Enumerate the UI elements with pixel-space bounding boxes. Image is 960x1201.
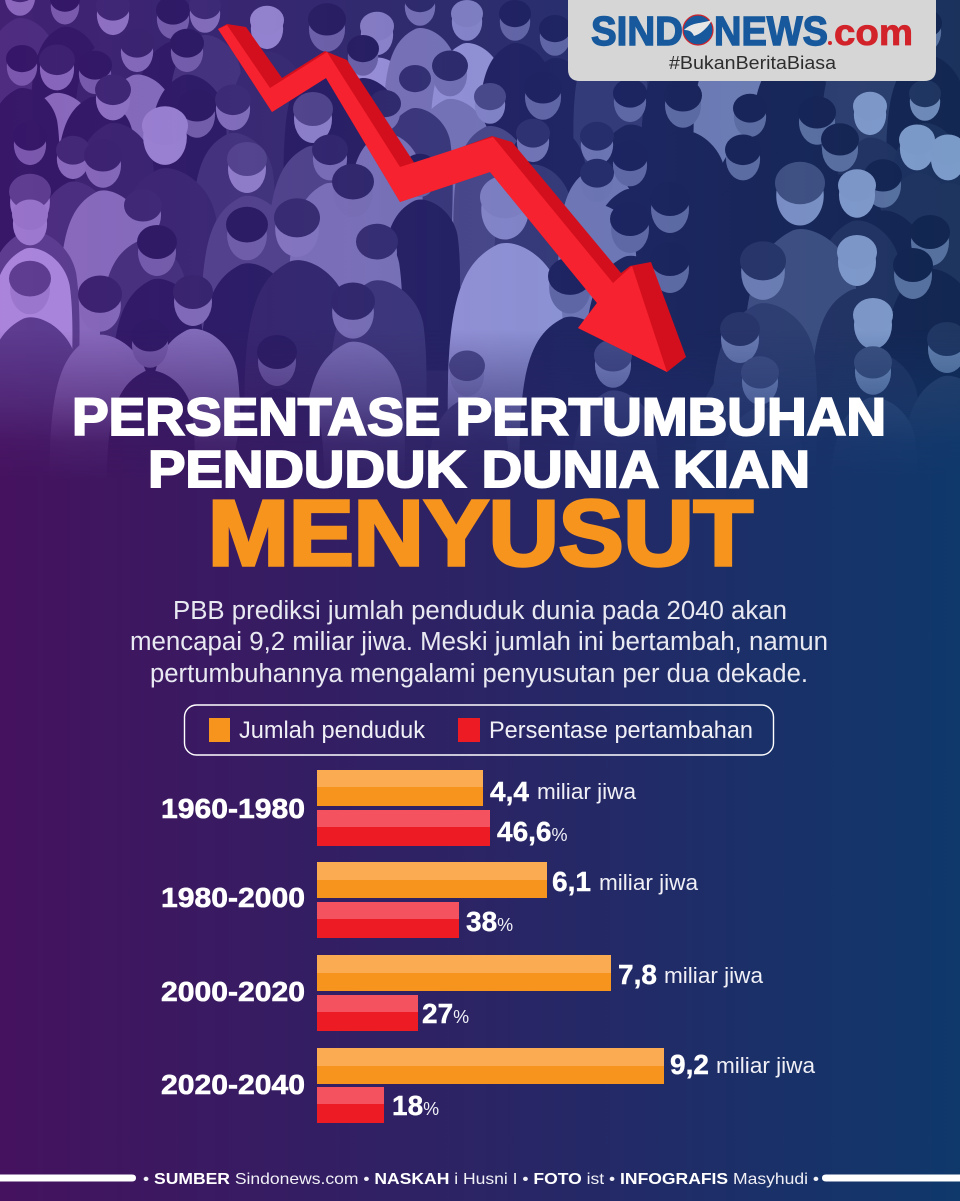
intro paragraph: PBB prediksi jumlah penduduk dunia pada 2040 akan xyxy=(173,597,787,625)
chart: bars 1960-1980: 4,4 xyxy=(490,776,529,807)
logo wordmark: NEWS xyxy=(714,8,828,54)
chart: bars 1980-2000: 38% xyxy=(466,906,513,937)
chart: bars 2000-2020: miliar jiwa xyxy=(664,963,764,988)
chart: bars 2020-2040: 18% xyxy=(392,1090,439,1121)
legend xyxy=(184,705,774,755)
intro paragraph: pertumbuhannya mengalami penyusutan per dua dekade. xyxy=(150,660,808,688)
chart: bars 1980-2000: 6,1 xyxy=(552,866,591,897)
crowd photo xyxy=(0,0,960,456)
logo wordmark: SIND xyxy=(591,8,683,54)
legend: Persentase pertambahan xyxy=(489,717,753,744)
logo wordmark: com xyxy=(834,12,913,53)
title: PERSENTASE PERTUMBUHAN xyxy=(72,388,886,447)
chart: bars 2000-2020: 7,8 xyxy=(618,959,657,990)
title: PENDUDUK DUNIA KIAN xyxy=(148,441,810,499)
footer credits: • SUMBER Sindonews.com • NASKAH i Husni I • FOTO ist • INFOGRAFIS Masyhudi • xyxy=(143,1171,819,1188)
chart: bars 2000-2020: 2000-2020 xyxy=(161,976,305,1007)
chart: bars 1960-1980: 46,6% xyxy=(497,816,568,847)
logo wordmark xyxy=(591,8,913,54)
chart: bars 1960-1980: miliar jiwa xyxy=(537,779,637,804)
intro paragraph: mencapai 9,2 miliar jiwa. Meski jumlah ini bertambah, namun xyxy=(130,628,828,656)
legend: Jumlah penduduk xyxy=(239,717,426,744)
intro paragraph xyxy=(130,597,828,688)
chart: bars 1960-1980: 1960-1980 xyxy=(161,793,305,824)
chart: bars 2020-2040: 9,2 xyxy=(670,1049,709,1080)
chart: bars 1980-2000: miliar jiwa xyxy=(599,870,699,895)
chart: bars 2000-2020 xyxy=(161,955,764,1031)
chart: bars 1960-1980 xyxy=(161,770,637,847)
chart: bars 2020-2040: miliar jiwa xyxy=(716,1053,816,1078)
title: MENYUSUT xyxy=(208,481,753,585)
chart: bars 1980-2000 xyxy=(161,862,699,938)
logo tagline: #BukanBeritaBiasa xyxy=(669,53,837,73)
icon: red falling arrow xyxy=(218,24,686,372)
chart: bars 2020-2040 xyxy=(161,1048,816,1123)
title xyxy=(72,388,886,585)
footer credits xyxy=(0,1171,960,1188)
panel: logo xyxy=(568,0,936,81)
chart: bars 2020-2040: 2020-2040 xyxy=(161,1069,305,1100)
chart: bars 2000-2020: 27% xyxy=(422,998,469,1029)
duotone tint xyxy=(0,0,960,480)
chart: bars 1980-2000: 1980-2000 xyxy=(161,882,305,913)
